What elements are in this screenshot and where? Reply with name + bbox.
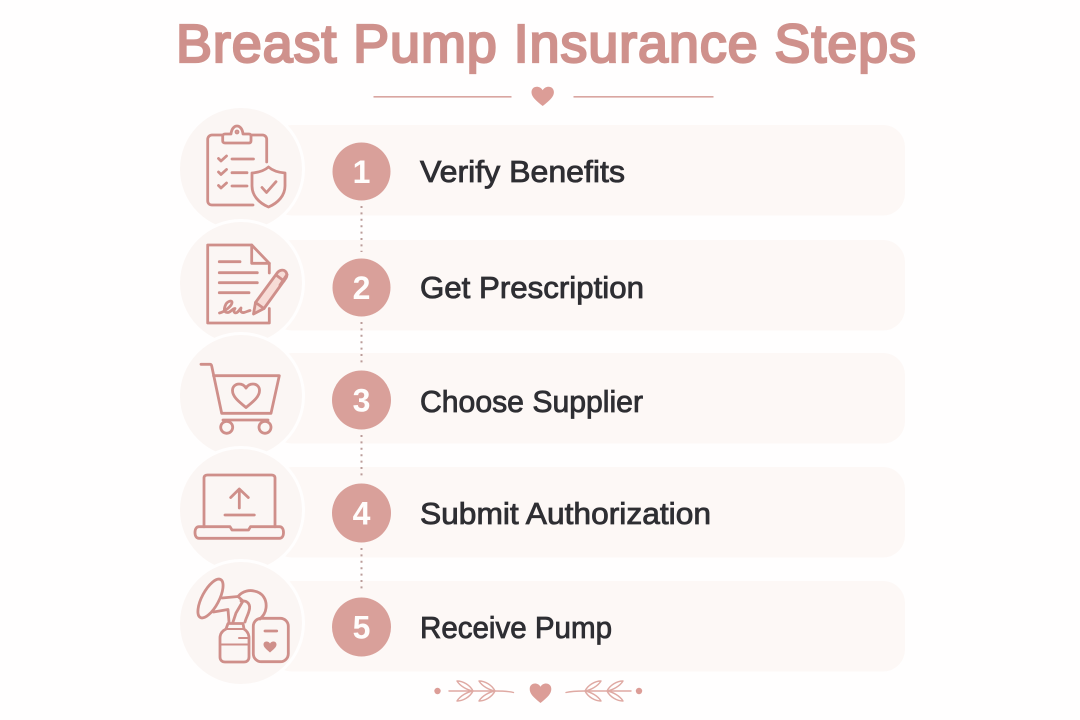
step 5 number badge: 5 xyxy=(353,610,370,646)
step 1 icon circle xyxy=(178,106,304,232)
step 3 icon circle xyxy=(178,334,304,458)
step 3 label: Choose Supplier xyxy=(420,384,643,419)
icon: prescription document with pen xyxy=(208,245,287,323)
step 5 number badge xyxy=(332,598,391,656)
icon: breast pump xyxy=(193,576,288,662)
icon: clipboard with shield xyxy=(208,126,285,207)
icon: shopping cart with heart xyxy=(201,364,279,433)
step 2 number badge: 2 xyxy=(353,270,370,306)
step 2 icon circle xyxy=(178,220,304,346)
step 1 number badge: 1 xyxy=(353,154,370,190)
icon: laptop with upload arrow xyxy=(195,475,284,538)
step 1 row background xyxy=(270,125,905,216)
step 4 number badge: 4 xyxy=(353,496,371,532)
title: Breast Pump Insurance Steps xyxy=(176,14,916,74)
footer ornament xyxy=(434,681,642,703)
step 5 label: Receive Pump xyxy=(420,610,612,645)
step 4 icon circle xyxy=(178,448,304,572)
step 1 number badge xyxy=(332,142,390,200)
panel: step 2 xyxy=(178,220,905,346)
dotted connector line between steps xyxy=(360,206,362,592)
panel: step 4 xyxy=(178,448,905,572)
panel: step 5 xyxy=(178,560,905,686)
step 1 label: Verify Benefits xyxy=(420,154,625,189)
title divider with heart xyxy=(374,87,714,106)
step 2 label: Get Prescription xyxy=(420,270,644,305)
step 3 number badge xyxy=(332,370,391,430)
step 2 row background xyxy=(270,240,905,330)
panel: step 1 xyxy=(178,106,905,232)
step 4 number badge xyxy=(332,484,391,542)
step 5 row background xyxy=(270,581,905,672)
step 3 row background xyxy=(270,353,905,444)
panel: step 3 xyxy=(178,334,905,458)
step 2 number badge xyxy=(332,258,390,316)
step 4 row background xyxy=(270,467,905,558)
step 4 label: Submit Authorization xyxy=(420,496,711,531)
step 3 number badge: 3 xyxy=(353,382,370,418)
step 5 icon circle xyxy=(178,560,304,686)
